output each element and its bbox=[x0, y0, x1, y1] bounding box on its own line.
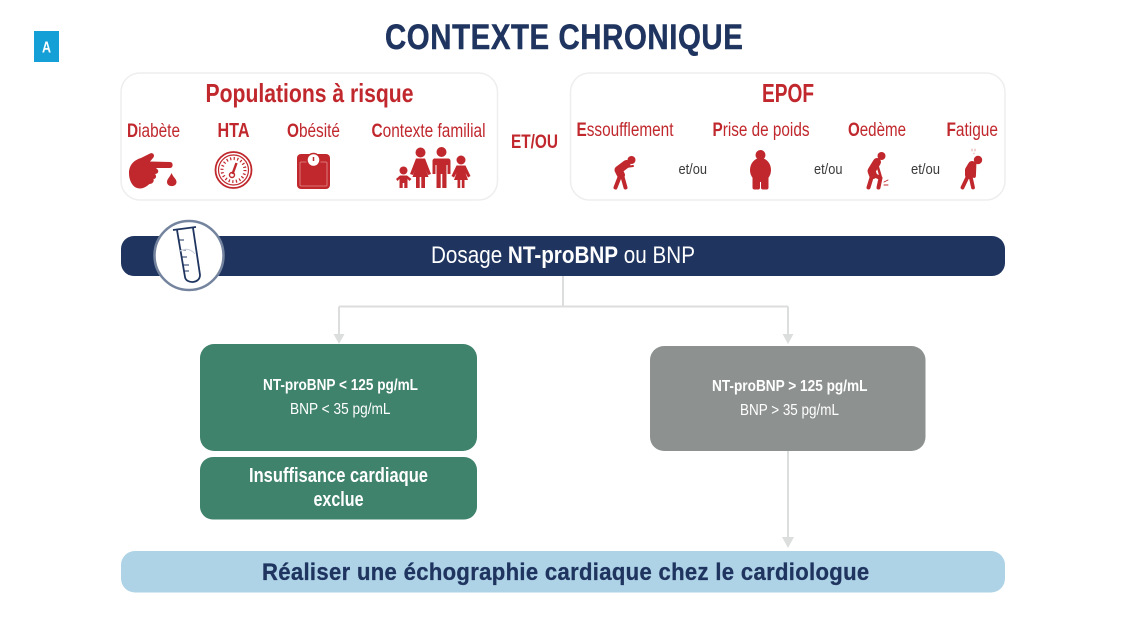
label: obésité: Obésité bbox=[287, 121, 340, 142]
text: exclue: exclue bbox=[314, 489, 364, 511]
text: et/ou 3: et/ou bbox=[911, 161, 940, 178]
banner: dosage NT-proBNP bbox=[121, 236, 1005, 276]
icon: family bbox=[396, 147, 470, 188]
box: high NT-proBNP result bbox=[650, 346, 926, 451]
text: NT-proBNP over 125: NT-proBNP > 125 pg/mL bbox=[712, 378, 868, 395]
text: BNP under 35: BNP < 35 pg/mL bbox=[290, 401, 391, 418]
icon: finger with blood drop bbox=[129, 153, 176, 188]
icon: person with oedema bbox=[868, 152, 888, 188]
label: et/ou connector: ET/OU bbox=[511, 132, 558, 153]
text: NT-proBNP under 125: NT-proBNP < 125 pg/mL bbox=[263, 377, 418, 394]
title: CONTEXTE CHRONIQUE bbox=[385, 18, 743, 57]
icon: breathless person bbox=[616, 156, 636, 188]
label: diabète: Diabète bbox=[127, 121, 180, 142]
badge A bbox=[34, 31, 59, 62]
text: BNP over 35: BNP > 35 pg/mL bbox=[740, 402, 839, 419]
label: prise de poids: Prise de poids bbox=[712, 120, 810, 141]
label: fatigue: Fatigue bbox=[946, 120, 998, 141]
badge A: A bbox=[42, 40, 51, 56]
icon: fatigued person bbox=[962, 149, 982, 188]
banner text: Réaliser une échographie cardiaque chez le cardiologue bbox=[262, 558, 869, 585]
label: contexte familial: Contexte familial bbox=[372, 121, 486, 142]
text: insuffisance cardiaque: Insuffisance cardiaque bbox=[249, 465, 428, 487]
icon: blood pressure gauge bbox=[216, 152, 252, 188]
banner: echocardiography bbox=[121, 551, 1005, 592]
panel: populations à risque bbox=[121, 73, 498, 200]
icon: test tube bbox=[154, 221, 224, 290]
banner text: Dosage NT-proBNP ou BNP bbox=[431, 242, 695, 269]
heading: EPOF: EPOF bbox=[762, 78, 814, 108]
icon: overweight person bbox=[750, 150, 771, 190]
panel: EPOF bbox=[570, 73, 1005, 200]
text: et/ou 2: et/ou bbox=[814, 161, 842, 178]
label: HTA: HTA bbox=[218, 120, 250, 142]
label: essoufflement: Essoufflement bbox=[576, 120, 674, 141]
flow arrows from banner to results bbox=[334, 276, 794, 344]
text: et/ou 1: et/ou bbox=[678, 161, 707, 178]
arrow to echocardiography bbox=[782, 451, 794, 548]
box: low NT-proBNP result bbox=[200, 344, 477, 451]
heading: populations à risque: Populations à risque bbox=[206, 78, 414, 108]
box: heart failure excluded bbox=[200, 457, 477, 520]
icon: weighing scale bbox=[297, 154, 330, 189]
label: oedème: Oedème bbox=[848, 120, 906, 141]
